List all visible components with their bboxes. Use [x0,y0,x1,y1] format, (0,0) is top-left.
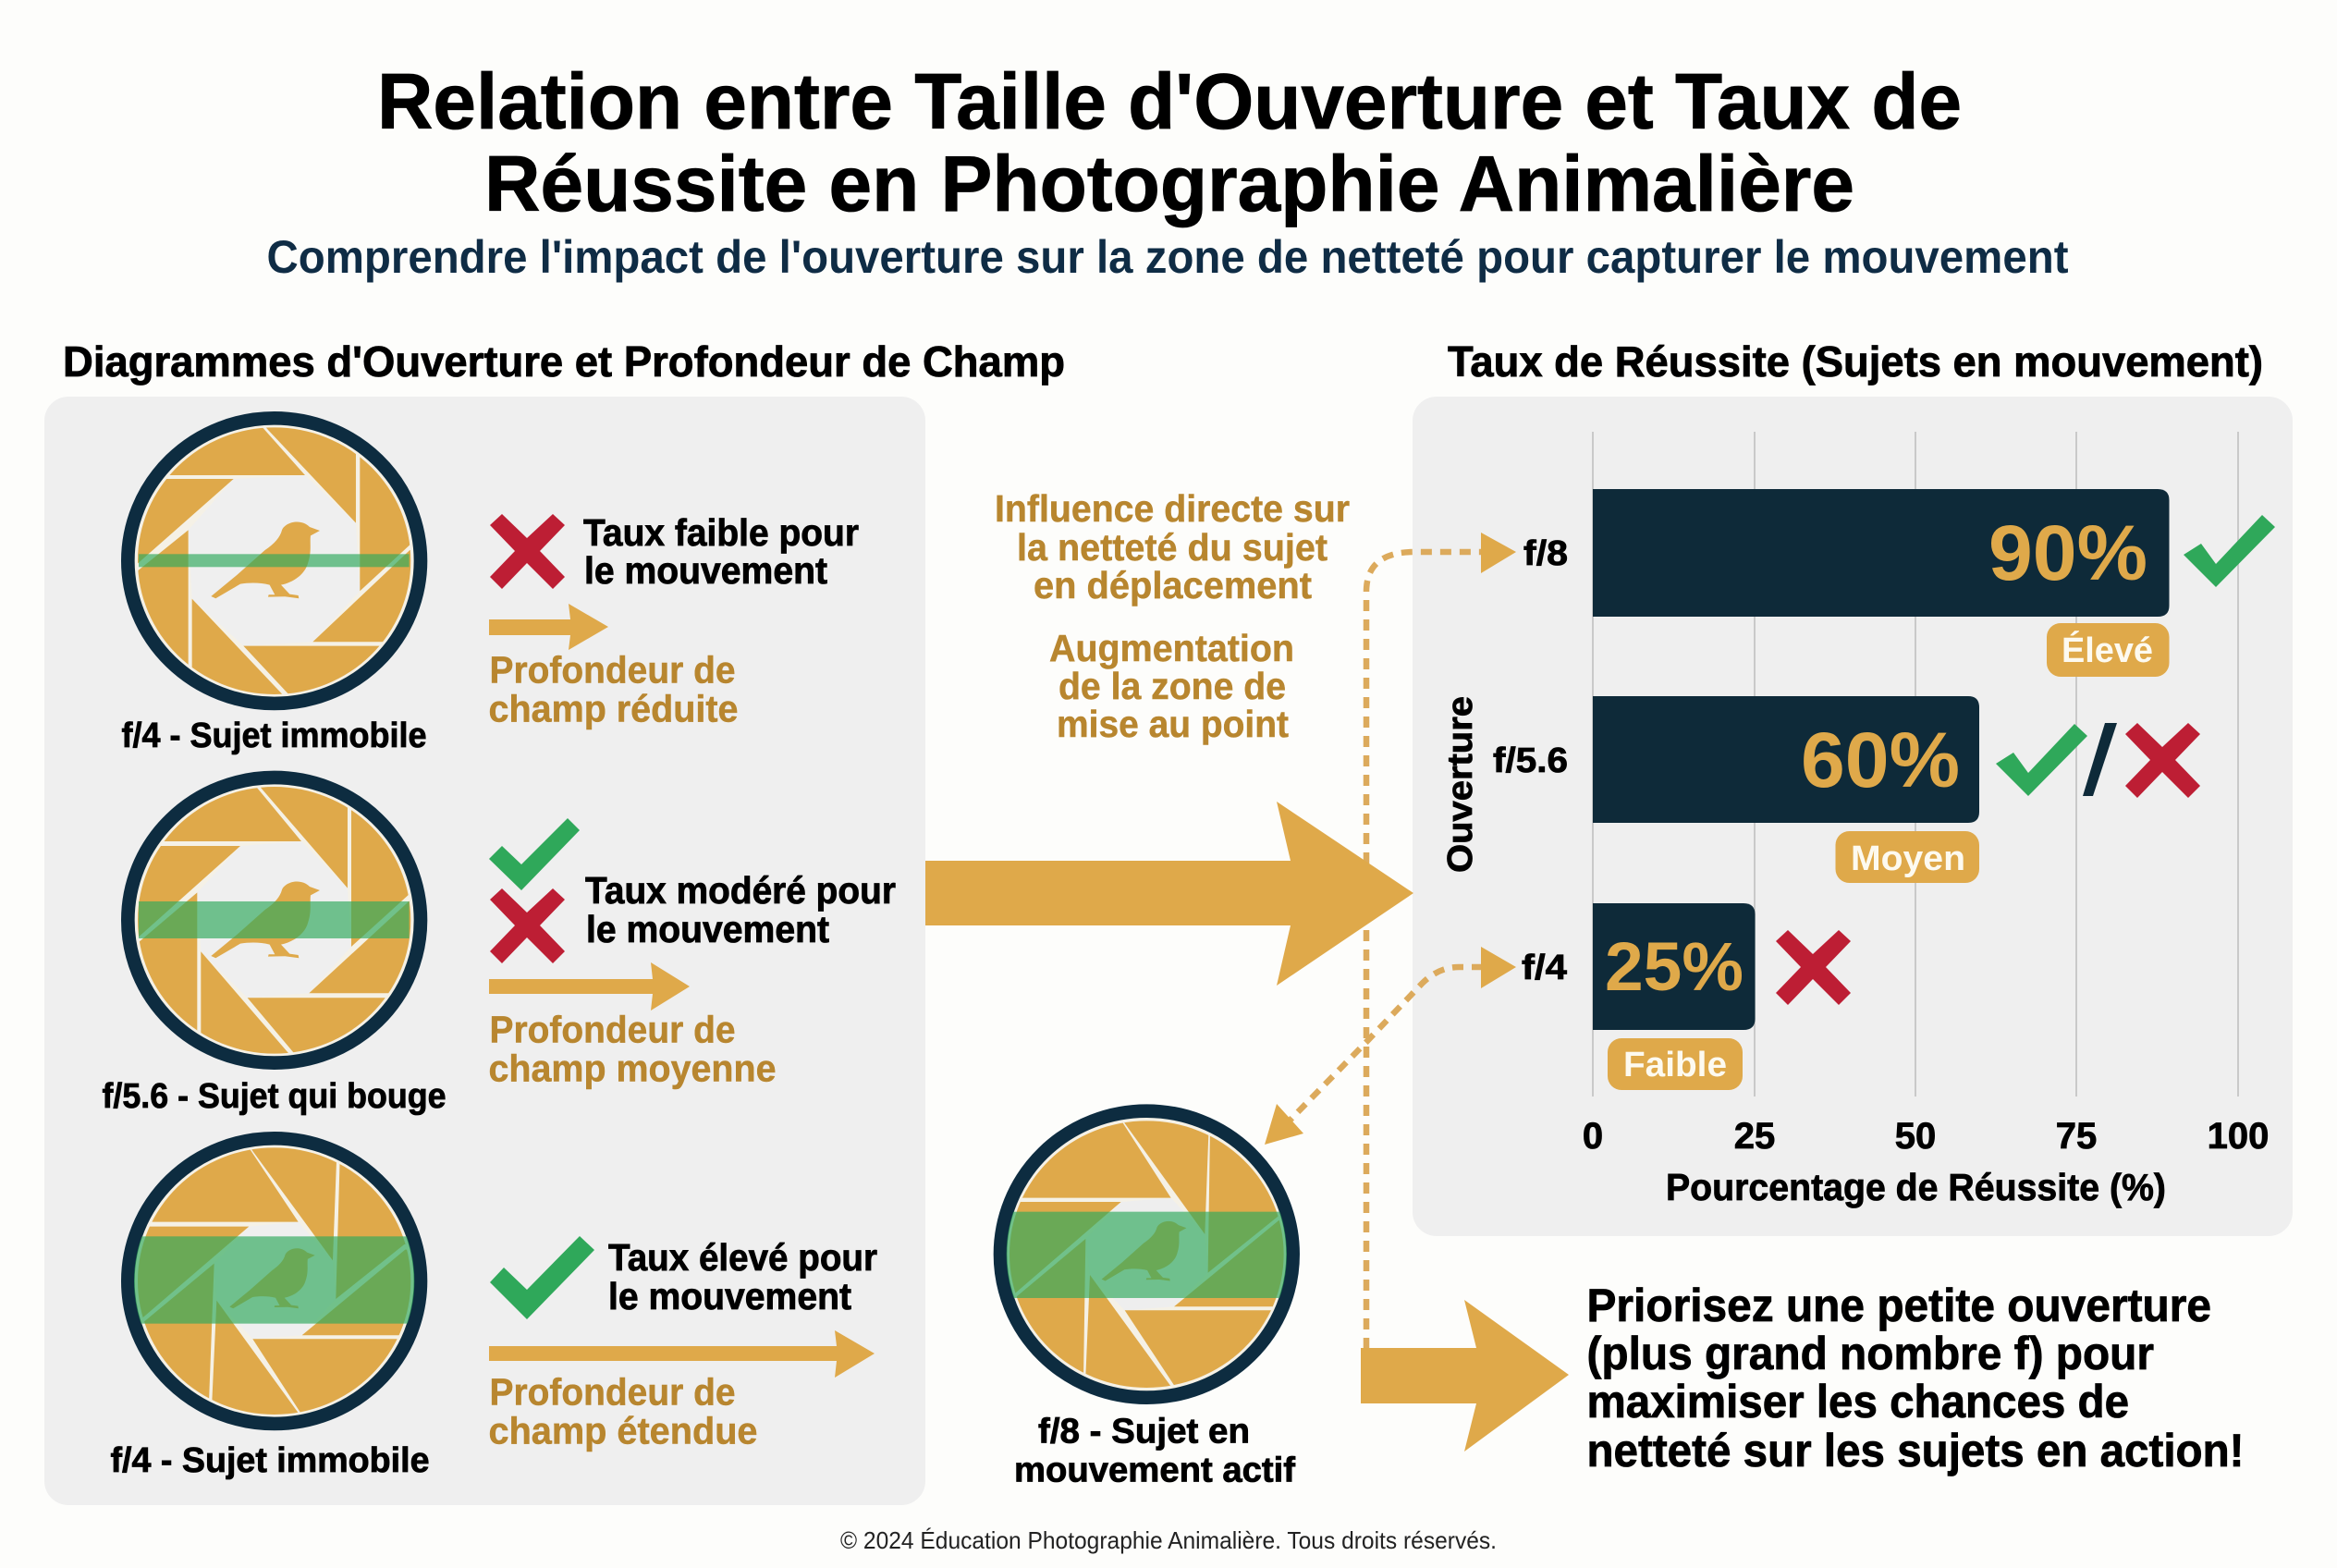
text: low rate: le mouvement [584,549,827,592]
text: influence annotation: la netteté du sujet [1017,526,1328,569]
text: moderate rate: Taux modéré pour [585,869,896,912]
text: extended depth [488,1370,758,1452]
text: moderate rate: le mouvement [586,908,829,950]
bar: f/5.6 60% [1593,696,1979,823]
heading: diagrams: Diagrammes d'Ouverture et Profondeur de Champ [63,337,1065,386]
arrow: dotted link to f/8 [1366,533,1516,1349]
label: f/4 still: f/4 - Sujet immobile [111,1441,429,1480]
text: focus zone annotation: Augmentation [1049,627,1294,669]
bar: f/8 90% [1593,489,2169,617]
text: medium depth: champ moyenne [488,1047,777,1089]
badge: Moyen [1836,831,1979,883]
arrow: big arrow to chart [925,802,1413,986]
footer: © 2024 Éducation Photographie Animalière. Tous droits réservés. [840,1526,1497,1554]
text: reduced depth: Profondeur de [490,649,736,692]
iris: f/8 moving subject [996,1109,1310,1399]
category label: f/5.6: f/5.6 [1493,741,1568,780]
text: influence annotation: Influence directe sur [995,487,1350,530]
text: high rate [608,1236,877,1317]
callout: conclusion: maximiser les chances de [1586,1376,2129,1427]
x axis title: Pourcentage de Réussite (%) [1666,1166,2166,1208]
title: Relation entre Taille d'Ouverture et Taux de [377,58,1962,146]
text: focus zone annotation [1049,627,1294,745]
bar: f/4 25% [1593,903,1755,1030]
category label: f/8: f/8 [1523,534,1568,573]
iris: f/4 still subject, shallow depth [123,418,432,712]
category label: f/4: f/4 [1522,949,1567,987]
arrow: short depth [489,604,608,650]
badge: Faible: Faible [1623,1046,1727,1084]
badge: Faible [1608,1038,1743,1090]
text: focus zone annotation: de la zone de [1058,665,1286,707]
x axis ticks: 50 [1895,1116,1936,1157]
text: reduced depth [488,649,738,730]
heading: success rate: Taux de Réussite (Sujets en mouvement) [1448,337,2263,386]
x axis ticks: 0 [1583,1116,1603,1157]
bar: f/5.6 60%: 60% [1801,717,1960,803]
icon: green check [2184,515,2275,587]
arrow: long depth [489,1330,875,1378]
icon: green check [489,818,580,890]
badge: Moyen: Moyen [1851,839,1965,878]
icon: check slash cross [1996,723,2200,798]
callout: conclusion: (plus grand nombre f) pour [1586,1328,2154,1379]
icon: red cross [1776,930,1851,1005]
text: influence annotation: en déplacement [1034,564,1312,606]
panel: success rate chart [1413,397,2293,1236]
subtitle: Comprendre l'impact de l'ouverture sur la zone de netteté pour capturer le mouvement [266,231,2069,283]
y axis title: Ouverture [1441,696,1480,873]
label: f/5.6 moving: f/5.6 - Sujet qui bouge [102,1077,446,1116]
arrow: to conclusion [1361,1300,1569,1452]
label: f/8 moving: f/8 - Sujet en [1038,1413,1250,1452]
text: influence annotation [995,487,1350,606]
arrow: medium depth [489,962,690,1011]
text: high rate: Taux élevé pour [608,1236,877,1279]
badge: Élevé: Élevé [2062,630,2153,670]
text: medium depth [488,1008,777,1089]
text: low rate [583,511,859,592]
text: extended depth: champ étendue [488,1409,758,1452]
callout: conclusion [1586,1280,2245,1476]
text: moderate rate [585,869,896,950]
x axis ticks: 100 [2208,1116,2269,1157]
text: extended depth: Profondeur de [490,1370,736,1413]
title: Réussite en Photographie Animalière [484,141,1854,228]
label: f/4 still: f/4 - Sujet immobile [122,717,427,755]
badge: Élevé [2047,623,2169,677]
label: f/8 moving: mouvement actif [1014,1452,1295,1490]
iris: f/4 still subject, deep depth [123,1137,432,1427]
icon: red cross [490,514,565,589]
icon: green check [490,1236,594,1319]
callout: conclusion: netteté sur les sujets en action! [1586,1425,2245,1476]
x axis ticks: 75 [2056,1116,2097,1157]
icon: red cross [490,888,565,963]
bar: f/8 90%: 90% [1988,509,2147,596]
text: focus zone annotation: mise au point [1057,703,1289,745]
text: medium depth: Profondeur de [490,1008,736,1050]
callout: conclusion: Priorisez une petite ouverture [1586,1280,2211,1331]
iris: f/5.6 moving subject, medium depth [123,777,432,1066]
text: high rate: le mouvement [608,1275,851,1317]
x axis ticks: 25 [1734,1116,1775,1157]
x axis ticks [1583,1116,2269,1157]
text: low rate: Taux faible pour [583,511,859,554]
text: reduced depth: champ réduite [488,688,738,730]
panel: aperture diagrams [44,397,925,1505]
arrow: dotted link f/4 to f/8 iris [1265,947,1516,1145]
title [377,58,1962,228]
label: f/8 moving [1014,1413,1295,1490]
bar: f/4 25%: 25% [1605,928,1744,1005]
